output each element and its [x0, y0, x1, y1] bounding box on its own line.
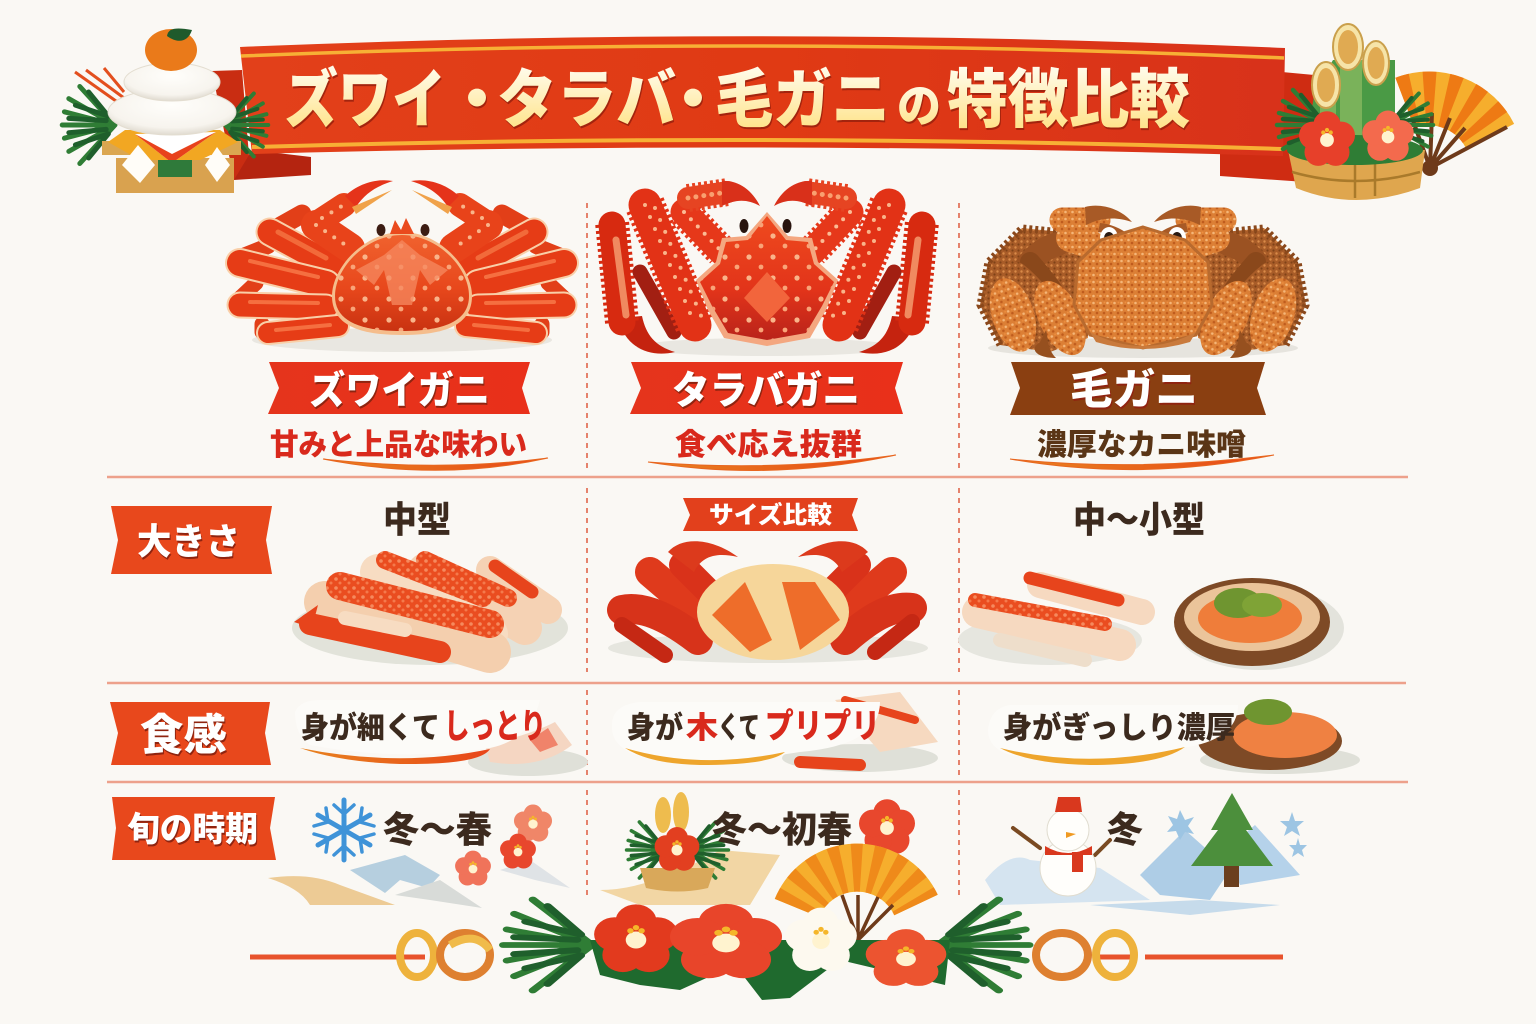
texture: king crab: 身が	[627, 711, 683, 745]
icon: crab meat	[468, 722, 588, 776]
size comparison tag: サイズ比較	[709, 501, 832, 529]
crab: king crab	[612, 181, 922, 356]
plate: king crab	[608, 541, 928, 663]
label: hairy crab	[1010, 362, 1266, 415]
row label: season: 旬の時期	[127, 811, 258, 849]
title text: ・	[661, 64, 725, 136]
ribbon tails	[212, 70, 1325, 183]
title text: タラバ	[497, 64, 676, 136]
texture: hairy crab: 身がぎっしり濃厚	[1003, 711, 1235, 745]
plate: crab miso shell	[1174, 578, 1344, 670]
tagline: hairy crab	[1010, 429, 1274, 470]
texture: king crab: くて	[718, 712, 760, 745]
texture: snow crab: しっとり	[444, 708, 546, 746]
size: hairy crab medium to small: 中〜小型	[1073, 499, 1205, 540]
tagline: snow crab: 甘みと上品な味わい	[270, 429, 527, 462]
crab: hairy crab	[980, 206, 1306, 363]
season: winter	[985, 793, 1307, 915]
texture: hairy crab	[988, 699, 1360, 774]
row label: texture	[110, 702, 271, 765]
title text: の	[897, 80, 941, 132]
size: snow crab medium: 中型	[383, 499, 451, 540]
label: snow crab	[268, 362, 530, 414]
bottom decoration	[250, 868, 1283, 1000]
season: winter to early spring: 冬〜初春	[712, 809, 852, 850]
icon: crab meat	[782, 692, 938, 772]
icon: small kadomatsu	[627, 792, 728, 892]
pine branches	[503, 900, 1029, 1000]
tagline: hairy crab: 濃厚なカニ味噌	[1037, 429, 1246, 462]
title text: ・	[445, 64, 509, 136]
row label: season	[112, 797, 276, 860]
texture: snow crab	[295, 700, 588, 776]
icon: snowflake	[314, 800, 374, 860]
crab: snow crab	[238, 180, 566, 352]
knot left	[400, 933, 490, 977]
label: snow crab: ズワイガニ	[309, 369, 490, 413]
icon: kagami mochi	[62, 28, 268, 193]
label: king crab	[630, 362, 903, 414]
icon: fan	[1405, 99, 1507, 176]
tagline: king crab	[648, 429, 896, 471]
plate: hairy crab legs	[958, 578, 1142, 665]
tagline: king crab: 食べ応え抜群	[675, 429, 862, 462]
title text	[284, 64, 1190, 136]
camellias	[594, 904, 946, 986]
icon: kadomatsu and fan	[1277, 24, 1507, 200]
icon: crab miso shell	[1198, 699, 1360, 774]
texture: king crab	[612, 692, 938, 772]
label: hairy crab: 毛ガニ	[1070, 366, 1198, 413]
title banner	[212, 36, 1325, 183]
row label: texture: 食感	[140, 712, 227, 760]
title text: 特徴比較	[947, 64, 1190, 136]
season: winter to spring: 冬〜春	[383, 809, 492, 850]
texture: king crab: 木	[686, 712, 718, 745]
knot right	[1036, 933, 1134, 977]
season: winter to early spring	[600, 792, 915, 905]
label: king crab: タラバガニ	[672, 370, 860, 413]
row label: size: 大きさ	[137, 521, 240, 562]
dividers	[107, 203, 1408, 900]
size comparison tag	[683, 498, 858, 531]
row label: size	[111, 506, 272, 574]
season: winter: 冬	[1107, 809, 1143, 850]
title text: ズワイ	[284, 64, 446, 136]
season: winter to spring	[268, 800, 570, 908]
texture: king crab: プリプリ	[765, 708, 880, 746]
texture: snow crab: 身が細くて	[301, 711, 440, 745]
title text: 毛ガニ	[715, 64, 890, 136]
plate: snow crab legs	[292, 560, 568, 665]
icon: snowman	[1013, 797, 1110, 896]
icon: pine tree	[1191, 793, 1273, 887]
fan	[797, 868, 916, 940]
